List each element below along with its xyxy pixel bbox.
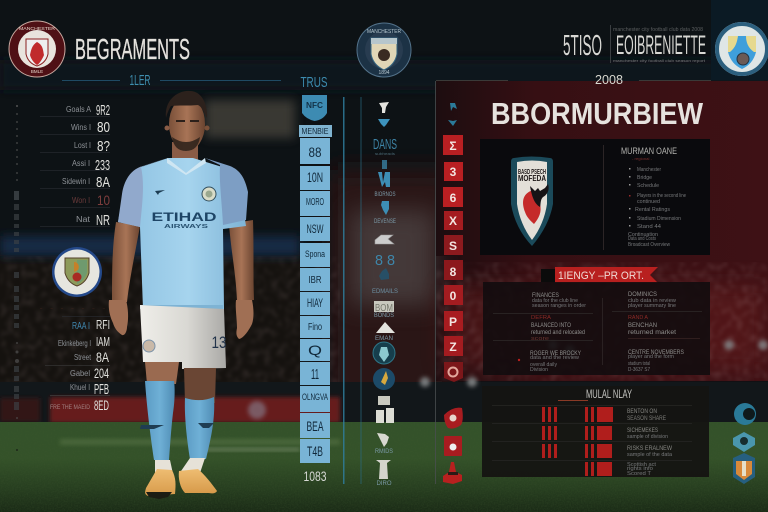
panel: club crest and facts: - regional - [632, 157, 653, 161]
panel: two column notes: player summary line [628, 303, 676, 309]
left stats table: 80 [97, 119, 110, 136]
title: BEGRAMENTS [75, 34, 190, 66]
left lower stats table: Khuel I [70, 383, 90, 392]
facts list: Manchester [637, 167, 661, 173]
panel: two column notes: score [531, 336, 549, 342]
shorts: 13 [212, 333, 226, 352]
crest: red club: MANCHESTER [19, 26, 56, 31]
centre stat column: MENBIE [302, 127, 328, 136]
panel: two column notes: CENTRE NOVEMBERS [628, 349, 685, 356]
facts list: Stand 44 [637, 224, 661, 230]
bar labels [627, 408, 673, 477]
red icon column: 3 [450, 165, 457, 179]
panel: two column notes: DEFRA [531, 315, 552, 321]
left lower stats table: 204 [94, 365, 109, 381]
left lower stats table: PFB [94, 381, 109, 398]
centre icon column: subheads [375, 151, 395, 156]
panel: two column notes: RAND A [628, 315, 649, 321]
stat cells: HIAY [307, 296, 323, 310]
facts list: Stadium Dimension [637, 216, 681, 222]
left lower stats table: Gabel [70, 369, 90, 378]
shield crest: MOFEDA [518, 174, 546, 183]
centre icon column: EMAN [375, 336, 393, 342]
top-right header [563, 0, 768, 80]
badge: orange shield [733, 453, 755, 484]
column shield: NFC [306, 101, 323, 110]
left lower stats table: – – – – – – – [40, 305, 106, 310]
icon: blue silhouette [379, 268, 389, 280]
top-right header: 5TISO [563, 30, 602, 62]
stat cells: Q [308, 342, 322, 358]
left lower stats table: IAM [96, 334, 110, 349]
stat cells: OLNGVA [302, 392, 328, 402]
stat cells: Fino [308, 322, 322, 333]
legs and socks [140, 362, 216, 476]
hair and head [164, 91, 210, 168]
panel: two column notes: DOMINICS [628, 291, 658, 298]
panel: two column notes: data and the review [530, 355, 579, 361]
left lower stats table [40, 305, 110, 413]
ribbon: 1IENGY –PR ORT. [558, 270, 644, 282]
stat cells: Spona [305, 249, 325, 259]
left stats table: Won I [72, 196, 90, 205]
icon: diamond [378, 119, 390, 127]
left stats table: 9R2 [96, 102, 110, 119]
navy crest box [711, 0, 768, 80]
crest: red club [9, 21, 65, 77]
top-right header: manchester city football club season report [613, 58, 706, 63]
left lower stats table: RFI [96, 317, 110, 332]
left dotted vertical rail [14, 105, 19, 451]
icon: teal round badge [373, 342, 395, 364]
icon: white badge [375, 235, 394, 244]
stat cells: 88 [308, 144, 322, 160]
panel: two column notes: returned and relocated [531, 330, 585, 336]
left lower stats table: FRE THE MAEID [50, 405, 91, 411]
sponsor text: ETIHAD [152, 210, 217, 224]
red icon column: 8 [450, 265, 457, 279]
year rule: 2008 [595, 72, 623, 87]
left stats table: Wins I [71, 123, 91, 132]
shield crest: BASD PSECH [518, 169, 546, 176]
facts list: Players in the second line [637, 193, 686, 199]
stat cells: T4B [307, 443, 323, 459]
bar labels: Scottish act [627, 462, 656, 468]
jersey [118, 158, 248, 309]
left stats table: Goals A [66, 105, 92, 114]
bar labels: sample of the data [627, 452, 673, 458]
shorts [140, 305, 226, 369]
left lower stats table: 8ED [94, 397, 109, 413]
bar labels: SEASON SHARE [627, 416, 666, 422]
left mid crest [52, 247, 102, 297]
stat cells: BEA [306, 418, 324, 434]
panel: two column notes: ROGER WE BROCKY [530, 350, 582, 357]
centre icon column: BIORNOS [374, 192, 396, 198]
badge: teal C [734, 403, 756, 425]
panel: two column notes: D-3637 S7 [628, 367, 650, 373]
arms and hands [109, 220, 254, 339]
centre icon column: BONDS [374, 313, 394, 319]
left stats table: Lost I [74, 141, 91, 150]
left lower stats table: Ekinkeberg I [58, 339, 91, 348]
left lower stats table: RAA I [72, 321, 90, 332]
centre icon column [372, 102, 398, 487]
red report panel [436, 81, 768, 256]
pitch [0, 422, 768, 512]
left lower stats table: Street [74, 353, 92, 362]
red icon column: P [449, 315, 457, 329]
facts list: Broadcast Overview [628, 242, 670, 248]
centre icon column: 8 8 [375, 252, 395, 269]
red icon column: Σ [449, 139, 457, 153]
left stats table: Nat [76, 215, 91, 224]
bar labels: SICHEMEKES [627, 427, 658, 434]
player [109, 91, 254, 499]
red icon column: X [449, 214, 457, 228]
left stats table: 10 [97, 192, 110, 208]
stat cells: NSW [306, 222, 324, 236]
facts list: Continuation [628, 232, 658, 238]
bar labels: BENTON ON [627, 408, 657, 415]
header: left crest and title [9, 21, 281, 89]
left stats table: 8A [96, 174, 110, 191]
vertical divider lines [343, 81, 436, 484]
panel: club crest and facts [480, 139, 710, 255]
icon: white kit [376, 396, 394, 423]
centre icon column: RMIDS [375, 449, 393, 455]
red icon column: Z [449, 340, 457, 354]
ribbon [541, 267, 658, 283]
centre crest [357, 23, 411, 77]
sub heading rule: 1LER [130, 72, 151, 89]
crest: blue club [715, 22, 768, 76]
red icon column [443, 103, 463, 484]
panel: two column notes: season ranges in order [532, 303, 586, 309]
centre crest: MANCHESTER [367, 29, 401, 35]
centre icon column: BOM [375, 303, 393, 314]
icon: mountain [376, 322, 395, 333]
facts list [628, 167, 686, 248]
facts heading: MURMAN OANE [621, 146, 677, 157]
centre icon column: DEVENSE [374, 219, 396, 225]
panel: two column notes [483, 282, 710, 375]
facts list: Data and Costs [628, 236, 656, 242]
panel: two column notes: BALANCED INTO [531, 322, 571, 329]
bar labels: RISKS ERALNEW [627, 445, 673, 452]
column heading: TRUS [300, 74, 328, 91]
icon: white bird [377, 433, 389, 447]
panel: two column notes: overall daily [530, 362, 557, 368]
stat cells: 10N [307, 169, 323, 185]
icon: white block [374, 301, 394, 312]
panel: two column notes: stadium total [628, 361, 650, 367]
centre icon column: EDMAILS [372, 289, 398, 295]
panel: red bar chart [482, 386, 709, 477]
facts list: Rental Ratings [635, 207, 670, 213]
left lower stats table: 8A [96, 349, 110, 365]
red icon column: 0 [450, 289, 457, 303]
facts list: Bridge [637, 175, 652, 181]
chart heading: MULAL NLAY [586, 387, 632, 401]
stat cells: IBR [308, 275, 322, 286]
icon group: blue figures [378, 160, 390, 215]
label DANS: DANS [373, 136, 397, 153]
facts list: continued [637, 199, 660, 205]
column total: 1083 [304, 468, 327, 484]
right small badges [733, 403, 756, 484]
top-right header: manchester city football club data 2008 [613, 27, 703, 33]
panel: two column notes: club data in review [628, 298, 676, 304]
facts list: Schedule [637, 183, 659, 189]
icon: trophy [379, 102, 389, 113]
bar labels: rights info [627, 466, 653, 472]
panel: two column notes: returned market [628, 330, 676, 336]
panel: two column notes: Division [530, 367, 548, 373]
shield crest [511, 156, 553, 246]
centre stat column [299, 74, 332, 484]
left stats table: NR [96, 212, 110, 229]
panel: two column notes: data for the club line [532, 298, 578, 304]
small blue icons [448, 103, 457, 126]
panel: two column notes: FINANCES [532, 292, 560, 299]
red bars [542, 407, 613, 476]
centre crest: 1894 [378, 70, 390, 76]
panel: two column notes: player and the form [628, 354, 674, 360]
stat cells: 11 [311, 366, 319, 383]
icon: white cup [376, 460, 391, 479]
bar labels: sample of division [627, 434, 668, 440]
panel: two column notes: BENCHAN [628, 322, 657, 329]
red icon column: S [449, 239, 457, 253]
bar labels: Scored T [627, 471, 652, 477]
left stats table: Assi I [72, 159, 90, 168]
left stats table [40, 102, 110, 229]
badge: teal knot [733, 432, 755, 452]
left stats table: 8? [97, 138, 110, 155]
stat cells: MORO [306, 197, 324, 208]
icon: blue yellow badge [373, 368, 395, 390]
crest: red club: BMLE [31, 69, 43, 74]
jersey: AIRWAYS [164, 224, 209, 230]
left stats table: 233 [95, 157, 110, 174]
report title: BBORMURBIEW [491, 96, 704, 131]
centre icon column: DIRO [376, 481, 392, 487]
boots [145, 469, 217, 499]
left stats table: Sidewin I [62, 177, 90, 186]
column shield [302, 95, 327, 121]
red icon column: 6 [450, 191, 457, 205]
stat cells [300, 138, 330, 463]
